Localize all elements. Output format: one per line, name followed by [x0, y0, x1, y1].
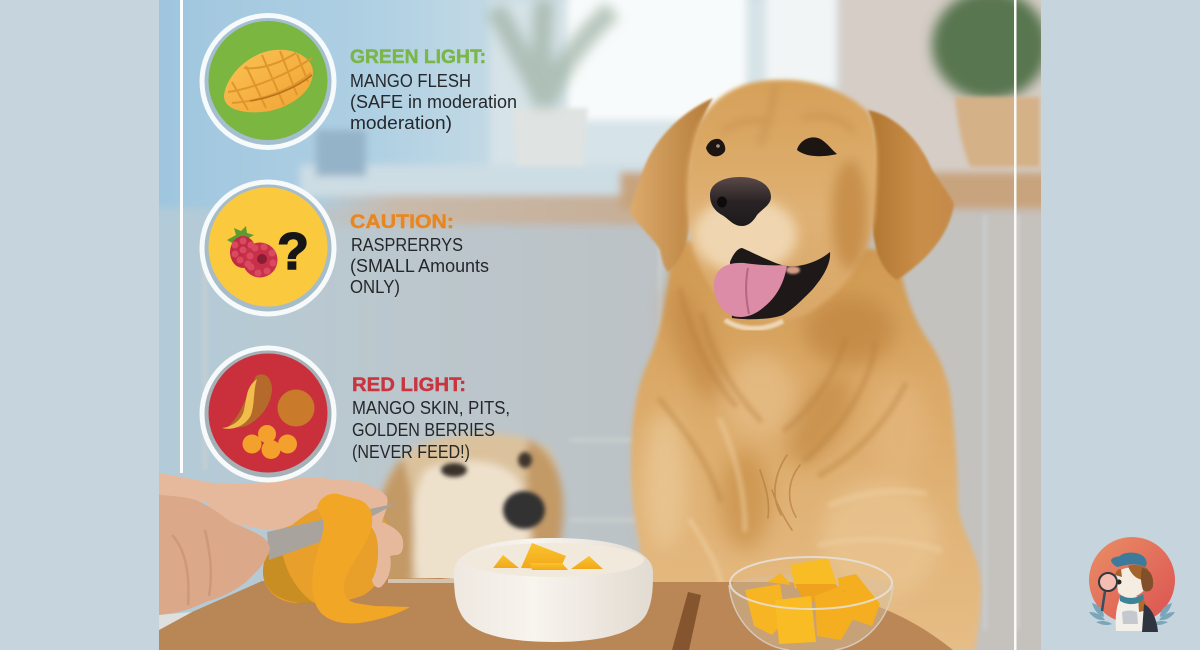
nostrils — [717, 196, 727, 208]
upper hand — [159, 473, 403, 588]
forehead shading — [761, 118, 770, 130]
paring knife — [267, 503, 397, 560]
heading: green light: GREEN LIGHT: — [350, 47, 486, 68]
text: raspberries: ONLY) — [350, 277, 400, 297]
dog head — [686, 80, 877, 321]
text: mango skin, pits, golden berries: (NEVER FEED!) — [352, 442, 470, 462]
blurred second dog — [371, 434, 563, 590]
glass bowl of mango cubes — [729, 557, 893, 650]
blurred potted plant, shelf — [932, 0, 1048, 167]
panel: green light — [200, 13, 517, 150]
magnifying glass — [1099, 573, 1117, 611]
dog head — [1116, 567, 1148, 597]
right eye — [797, 137, 837, 156]
text: mango skin, pits, golden berries: GOLDEN BERRIES — [352, 420, 495, 440]
gums — [786, 266, 800, 274]
mango cubes in bowl — [493, 543, 603, 570]
dog mouth — [730, 248, 830, 319]
panel: red light — [200, 346, 510, 482]
icon: golden berries — [242, 425, 297, 459]
kitchen background — [150, 0, 1053, 650]
dog tongue — [714, 263, 787, 317]
chest fur strands — [658, 316, 942, 582]
mango cubes — [745, 558, 880, 644]
chest shading — [643, 282, 940, 600]
lower lip — [725, 320, 783, 328]
panel: caution — [200, 180, 489, 316]
icon badge: red — [200, 346, 336, 482]
text: mango flesh: moderation) — [350, 113, 452, 133]
dog nose — [710, 177, 771, 226]
text: raspberries: (SMALL Amounts — [350, 256, 489, 276]
dog body — [631, 240, 981, 650]
left eye — [706, 139, 725, 156]
icon badge: yellow — [200, 180, 336, 316]
cutting board — [159, 578, 701, 650]
icon: question mark: ? — [277, 223, 309, 281]
right cheek shading — [832, 160, 868, 270]
icon: mango pit — [278, 390, 314, 426]
text: mango skin, pits, golden berries: MANGO SKIN, PITS, — [352, 398, 510, 418]
heading: red light: RED LIGHT: — [352, 375, 466, 396]
icon badge: green — [200, 13, 336, 150]
eye glints — [716, 144, 720, 148]
curled mango peel — [312, 494, 410, 623]
icon: mango half — [224, 50, 313, 112]
logo: beagle with magnifying glass — [1089, 537, 1175, 632]
blurred potted plant, window — [495, 0, 612, 166]
dog right ear — [868, 110, 954, 280]
mango being peeled — [263, 504, 390, 603]
dog body — [1116, 596, 1148, 631]
muzzle highlight — [693, 197, 797, 273]
lower hand fist — [159, 495, 270, 615]
text: mango flesh: MANGO FLESH — [350, 71, 471, 91]
text: raspberries: RASPRERRYS — [351, 235, 463, 255]
dog collar — [1120, 594, 1144, 604]
icon: raspberries — [227, 226, 278, 278]
heading: caution: CAUTION: — [350, 212, 454, 233]
white sleeve edge — [159, 612, 192, 630]
photo scene — [150, 0, 1053, 650]
text: mango flesh: (SAFE in moderation — [350, 92, 517, 112]
tongue crease — [746, 268, 749, 314]
second dog face features — [441, 452, 545, 529]
white frame line left — [180, 0, 183, 473]
white ceramic bowl — [454, 538, 653, 642]
dog left ear — [630, 98, 713, 272]
wooden table — [640, 582, 953, 650]
icon: mango skin — [222, 374, 272, 429]
laurel leaves — [1089, 603, 1175, 625]
dog cap — [1111, 553, 1147, 567]
main golden retriever — [630, 80, 981, 650]
white frame line right — [1014, 0, 1016, 650]
